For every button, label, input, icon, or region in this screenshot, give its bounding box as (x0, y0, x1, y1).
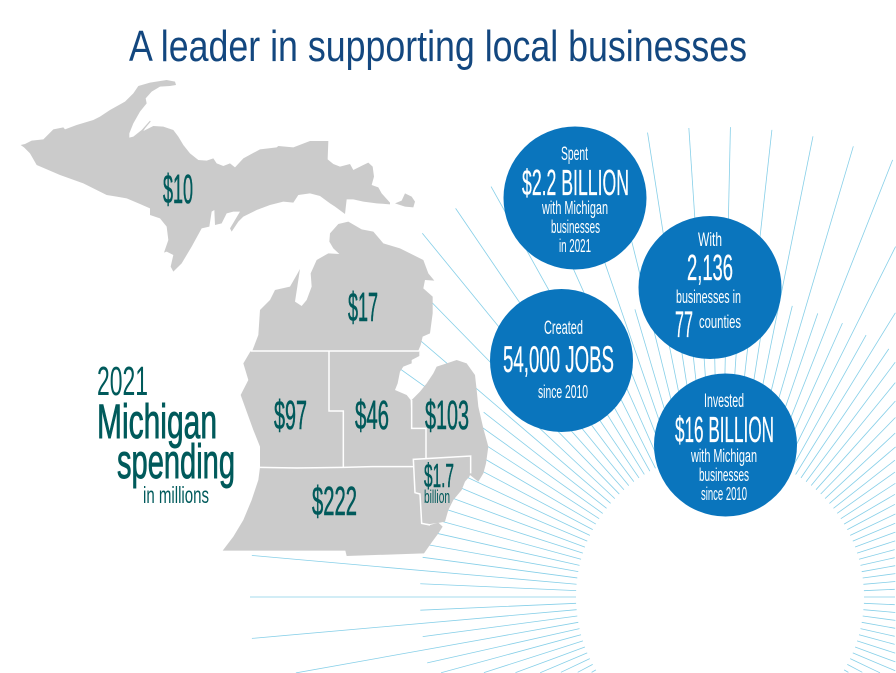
map: Michigan regions: $97 (274, 392, 307, 438)
map: Michigan regions: $46 (355, 392, 389, 438)
map: Michigan regions: $17 (348, 284, 378, 330)
region: West Michigan (241, 351, 343, 467)
legend: 2021 Michigan spending in millions: Michigan (97, 396, 217, 449)
callout: created 54,000 jobs: since 2010 (538, 382, 588, 402)
title: A leader in supporting local businesses (129, 22, 747, 71)
legend: 2021 Michigan spending in millions (97, 358, 235, 508)
legend: 2021 Michigan spending in millions: 2021 (97, 358, 148, 404)
callout: spent $2.2 billion: in 2021 (559, 236, 591, 256)
region: Southeast Michigan (413, 456, 471, 524)
callout: invested $16 billion: since 2010 (701, 484, 747, 504)
region: Upper Peninsula (21, 80, 415, 272)
callout: created 54,000 jobs: Created (544, 318, 583, 339)
legend: 2021 Michigan spending in millions: in millions (143, 482, 209, 508)
callout: with 2,136 businesses: counties (699, 312, 741, 332)
map: Michigan regions: $103 (425, 392, 469, 438)
map: Michigan regions (21, 80, 488, 556)
callout: spent $2.2 billion: businesses (551, 217, 600, 237)
callout: invested $16 billion: businesses (699, 465, 749, 485)
callout: invested $16 billion: with Michigan (690, 446, 757, 466)
callout: with 2,136 businesses: With (698, 230, 722, 251)
callout: created 54,000 jobs (490, 289, 633, 432)
label: $1.7 billion (424, 457, 454, 507)
callout: invested $16 billion (654, 374, 797, 516)
callout: with 2,136 businesses: 2,136 (687, 247, 733, 288)
callout: with 2,136 businesses: businesses in (676, 287, 741, 307)
callout: invested $16 billion: Invested (704, 391, 744, 412)
label: $1.7 billion: billion (424, 487, 450, 507)
callout: invested $16 billion: $16 BILLION (675, 409, 774, 450)
map: Michigan regions: $1.7 (424, 457, 454, 494)
map: Michigan regions: $10 (163, 166, 193, 212)
sunburst rays (250, 127, 896, 673)
region boundaries (251, 351, 471, 525)
region: Northern Lower Peninsula (252, 222, 434, 351)
region: South Michigan (223, 467, 443, 556)
callout: created 54,000 jobs: 54,000 JOBS (503, 339, 614, 380)
callout: spent $2.2 billion: with Michigan (541, 198, 608, 218)
region: Central Michigan (329, 351, 426, 467)
callout: spent $2.2 billion: $2.2 BILLION (522, 162, 629, 203)
callout: spent $2.2 billion (504, 126, 646, 270)
region: Thumb (412, 360, 488, 482)
callout: with 2,136 businesses (638, 216, 782, 359)
legend: 2021 Michigan spending in millions: spending (117, 436, 235, 489)
map: Michigan regions: $222 (312, 478, 357, 524)
callout: spent $2.2 billion: Spent (561, 144, 588, 165)
callout: with 2,136 businesses: 77 (675, 304, 693, 345)
